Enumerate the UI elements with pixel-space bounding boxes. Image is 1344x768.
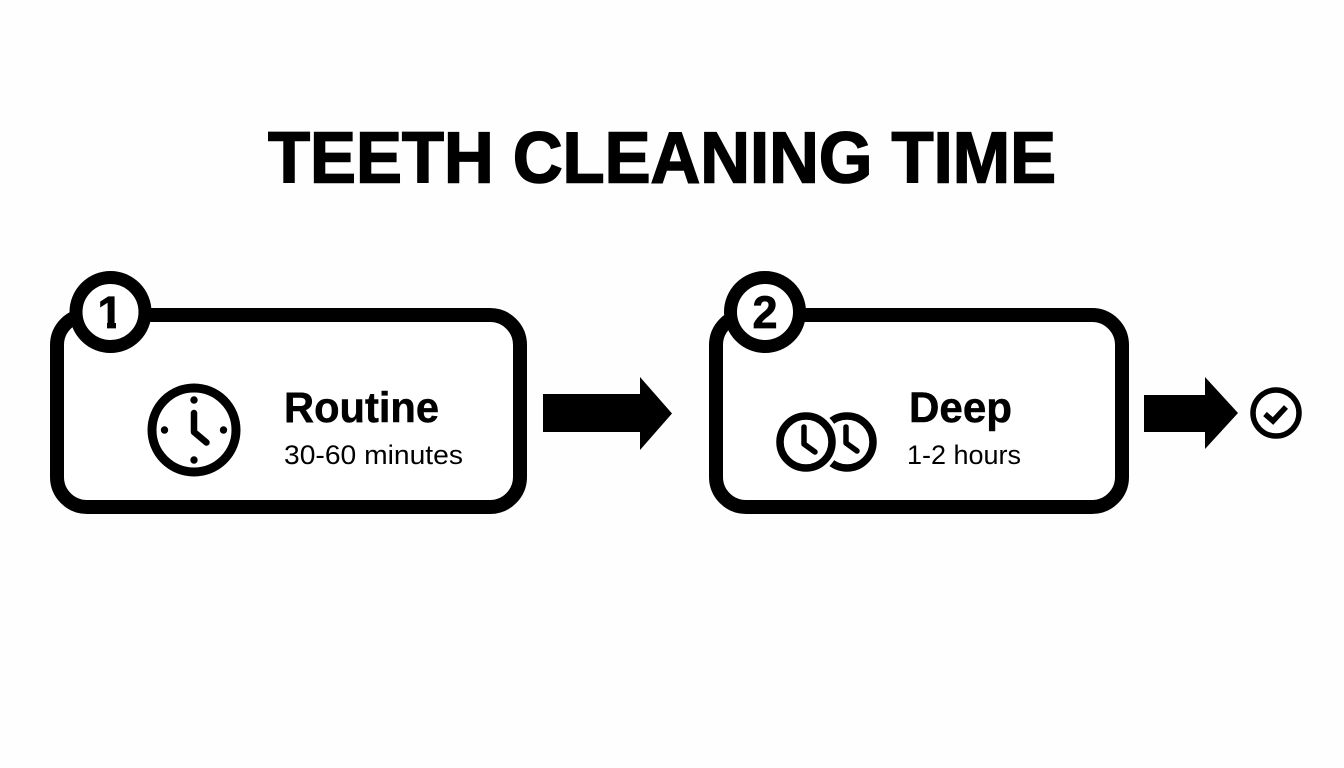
step badge 1: 1 (97, 287, 123, 338)
panel: routine step (57, 278, 520, 507)
duration: routine: 30-60 minutes (284, 440, 463, 470)
heading: routine: Routine (284, 384, 439, 432)
icon: clock (152, 388, 236, 472)
panel outline: deep (716, 315, 1122, 507)
step badge 2 (730, 278, 800, 346)
panel: deep step (716, 278, 1122, 507)
heading: deep: Deep (909, 384, 1012, 432)
icon: two clocks (772, 408, 873, 476)
step badge 2: 2 (752, 287, 778, 338)
arrow: routine to deep (543, 377, 672, 450)
step badge 1 (76, 278, 145, 346)
icon: check circle (1253, 390, 1299, 436)
panel outline: routine (57, 315, 520, 507)
title: TEETH CLEANING TIME (268, 118, 1056, 198)
arrow: deep to done (1144, 377, 1238, 449)
duration: deep: 1-2 hours (907, 440, 1021, 470)
